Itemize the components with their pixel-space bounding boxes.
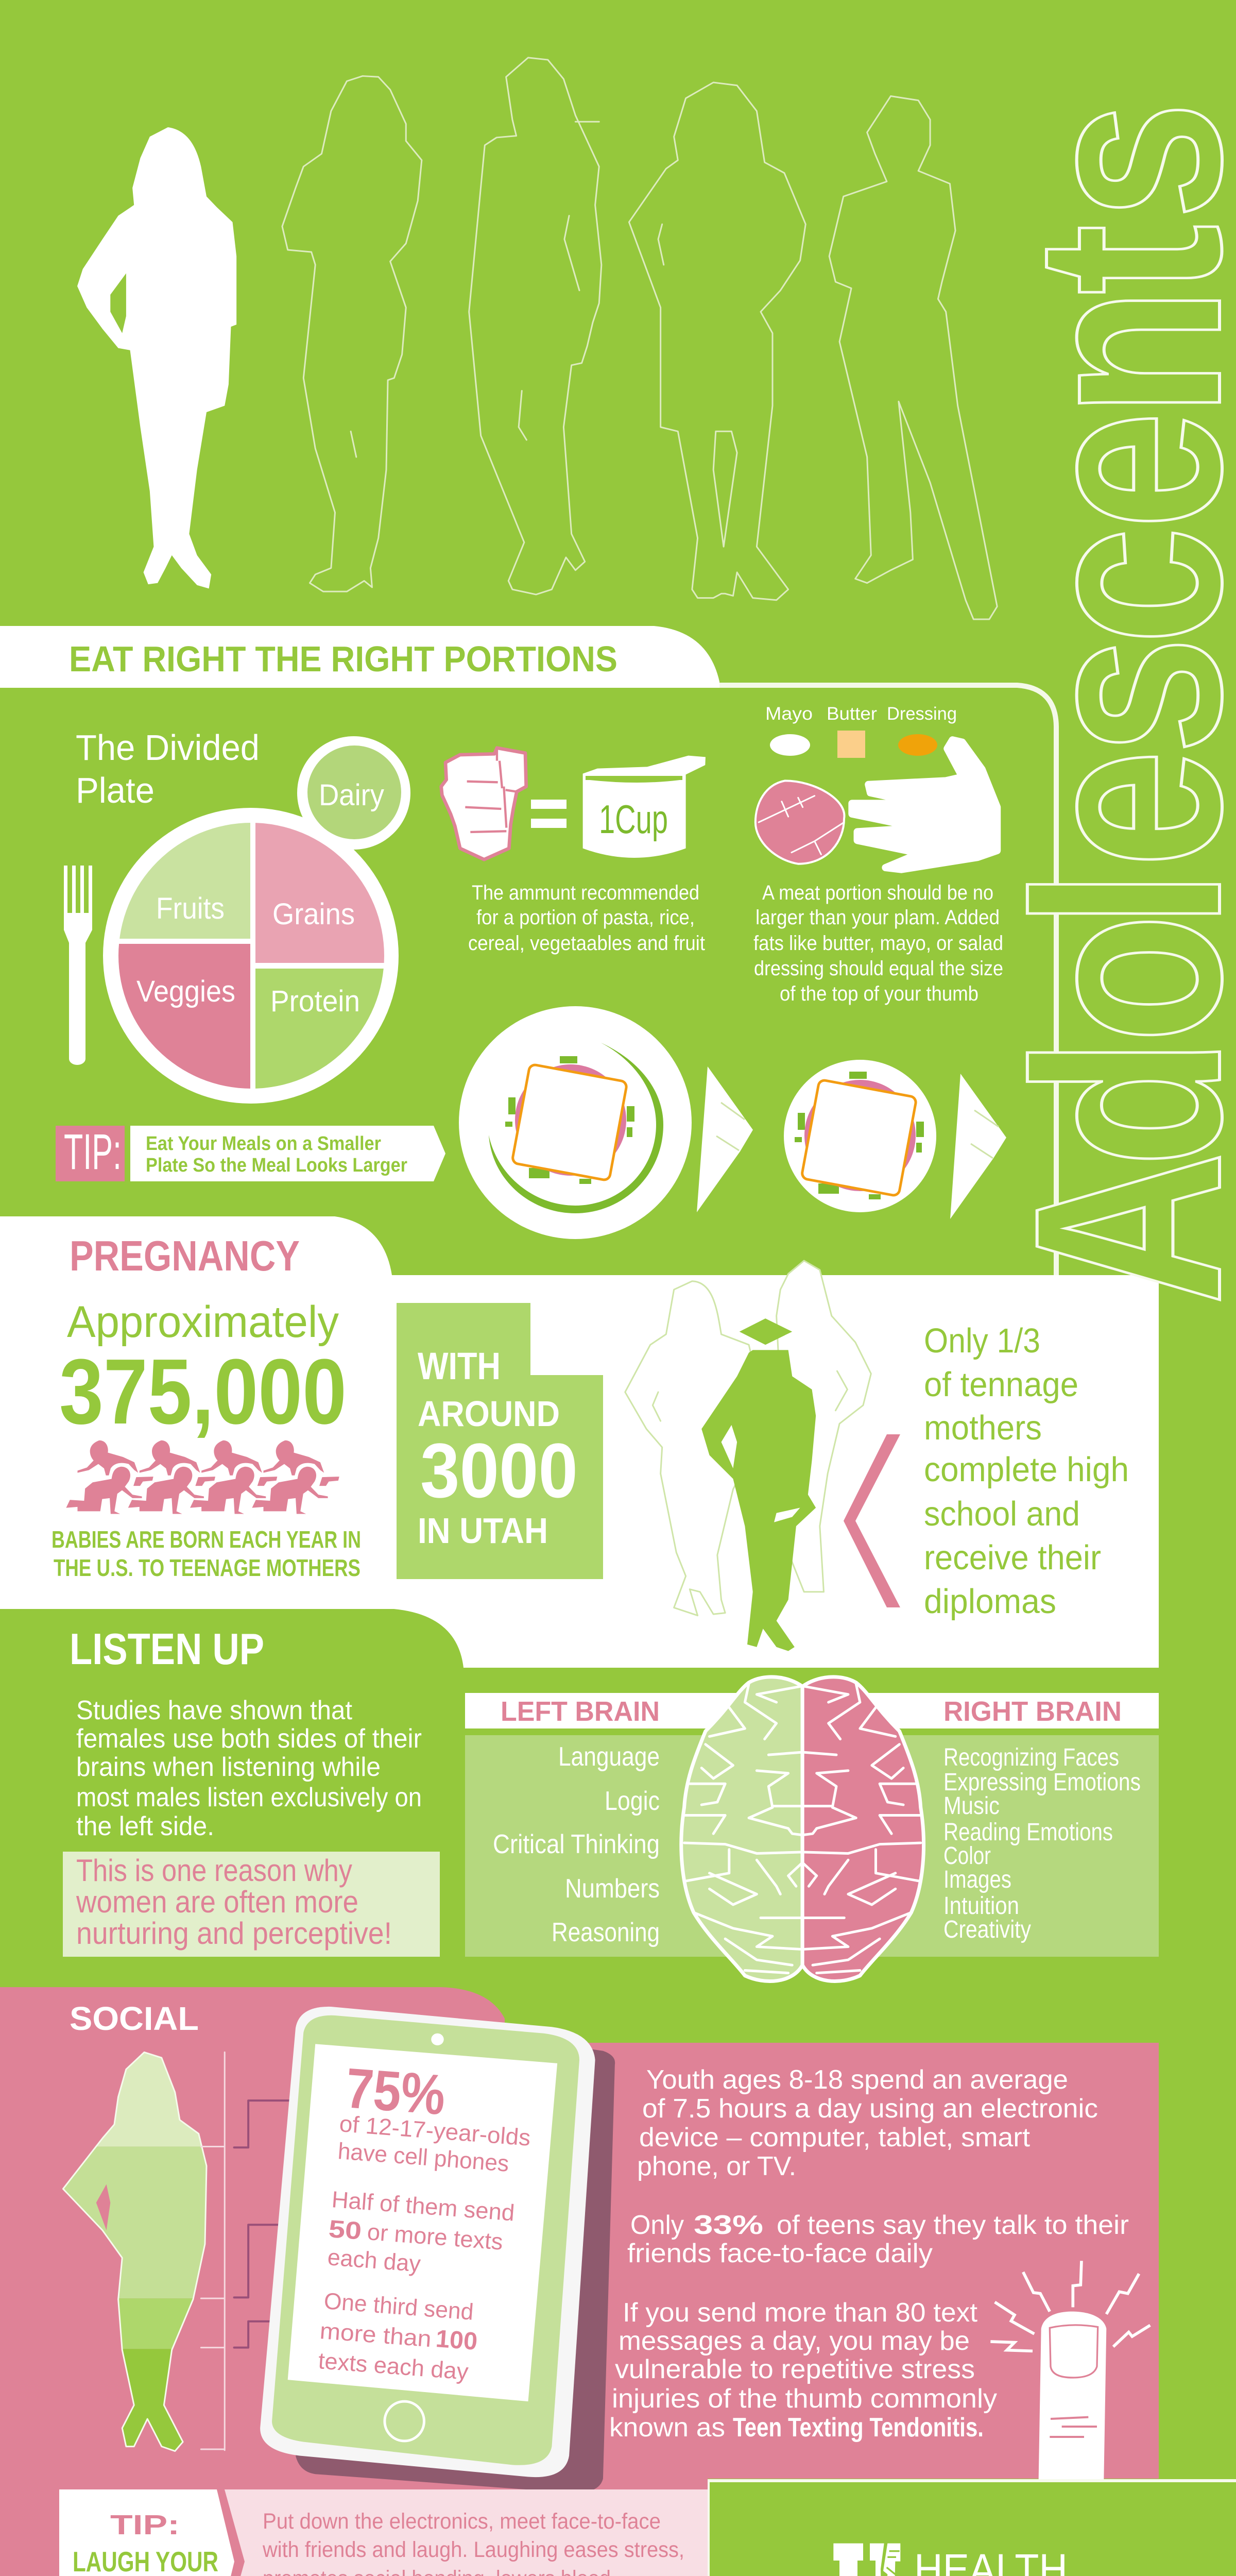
silhouette: outline woman 3 <box>469 58 602 595</box>
icon: meat <box>756 781 844 864</box>
plate rim <box>103 808 399 1104</box>
caption: one cup portion: The ammunt recommended <box>472 882 699 904</box>
text: screen time facts: 33% <box>694 2210 763 2240</box>
stat: 375,000 babies <box>52 1297 361 1581</box>
stat: 375,000 babies: 375,000 <box>59 1340 347 1444</box>
icon: equals sign <box>531 800 566 828</box>
tip: smaller plate: Eat Your Meals on a Smaller <box>146 1133 381 1155</box>
panel outline: eat right <box>719 685 1056 1276</box>
caption: meat portion: of the top of your thumb <box>780 982 978 1005</box>
text: screen time facts: known as <box>609 2413 725 2443</box>
phone screen statistics: have cell phones <box>337 2138 510 2177</box>
silhouette: outline woman 2 <box>282 76 422 591</box>
text: teen mothers diplomas <box>924 1321 1129 1621</box>
text: screen time facts: injuries of the thumb commonly <box>612 2384 997 2414</box>
figure: banded silhouette <box>55 2046 213 2455</box>
right brain list <box>943 1744 1141 1943</box>
figure with phone connections <box>62 2052 289 2452</box>
heading: pregnancy: PREGNANCY <box>70 1232 300 1280</box>
right brain list: Recognizing Faces <box>943 1744 1119 1771</box>
plate labels: Veggies <box>136 975 235 1008</box>
text: listening study <box>76 1696 422 1841</box>
left brain list: Language <box>558 1742 660 1772</box>
right brain list: Color <box>943 1842 991 1870</box>
text: screen time facts: friends face-to-face daily <box>627 2239 933 2268</box>
tip: laugh your head off: TIP: <box>110 2510 180 2540</box>
heading: the divided plate: Plate <box>76 770 154 810</box>
text: screen time facts: Youth ages 8-18 spend an average <box>646 2065 1068 2095</box>
panel: left and right brain lists <box>465 1693 1159 1957</box>
tip: smaller plate: TIP: <box>64 1124 122 1180</box>
left brain list <box>493 1742 660 1947</box>
text: screen time facts: device – computer, tablet, smart <box>639 2123 1031 2153</box>
phone screen statistics: 50 <box>328 2215 363 2245</box>
tip: smaller plate <box>56 1124 445 1181</box>
icon: thumb with sparks <box>990 2261 1150 2480</box>
text: teen mothers diplomas: receive their <box>924 1538 1101 1577</box>
right brain list: Intuition <box>943 1892 1019 1920</box>
text: listening study: the left side. <box>76 1811 214 1841</box>
icon: fork <box>64 866 92 1065</box>
icon: napkin 2 <box>950 1074 1006 1219</box>
utah shape with stat: 3000 <box>420 1427 578 1514</box>
icon: measuring cup <box>583 756 706 858</box>
text: screen time facts: vulnerable to repetitive stress <box>615 2354 975 2384</box>
panel: left and right brain lists: RIGHT BRAIN <box>943 1696 1122 1727</box>
dairy circle <box>297 736 410 850</box>
text: screen time facts: of 7.5 hours a day using an electronic <box>642 2094 1098 2124</box>
icon: crawling babies <box>66 1440 339 1514</box>
text: screen time facts <box>609 2065 1129 2443</box>
plate labels: Fruits <box>156 892 225 925</box>
caption: one cup portion <box>468 882 705 955</box>
legend: mayo butter dressing <box>765 704 957 758</box>
caption: one cup portion: for a portion of pasta, rice, <box>476 906 695 929</box>
legend: mayo butter dressing: Dressing <box>887 704 957 724</box>
chart: divided plate <box>103 736 410 1104</box>
right brain list: Expressing Emotions <box>943 1769 1141 1796</box>
ruler <box>201 2052 225 2450</box>
heading: eat right the right portions: EAT RIGHT THE RIGHT PORTIONS <box>69 639 617 679</box>
plate sections <box>113 819 389 1093</box>
right brain list: Music <box>943 1792 1000 1820</box>
phone screen statistics <box>317 2056 531 2385</box>
silhouette: white woman <box>77 127 236 588</box>
panel: logo block <box>708 2479 1236 2576</box>
stat: 375,000 babies: THE U.S. TO TEENAGE MOTHERS <box>54 1554 360 1581</box>
right outline woman <box>777 1261 871 1592</box>
text: teen mothers diplomas: complete high <box>924 1450 1129 1489</box>
caption: meat portion <box>753 882 1003 1005</box>
tip: laugh your head off: with friends and laugh. Laughing eases stress, <box>262 2537 684 2562</box>
text: listening study: Studies have shown that <box>76 1696 353 1725</box>
text: teen mothers diplomas: Only 1/3 <box>924 1321 1040 1360</box>
text: screen time facts: messages a day, you may be <box>619 2326 970 2356</box>
tip: smaller plate: Plate So the Meal Looks Larger <box>146 1155 407 1176</box>
heading: listen up: LISTEN UP <box>70 1625 264 1674</box>
heading: social: SOCIAL <box>70 2000 199 2037</box>
utah shape with stat <box>397 1303 603 1579</box>
icon: phone <box>260 2007 615 2493</box>
right brain list: Reading Emotions <box>943 1819 1113 1846</box>
icon: brain <box>681 1677 924 1981</box>
caption: meat portion: A meat portion should be no <box>762 882 993 904</box>
arrow: pink chevron <box>844 1434 900 1607</box>
phone screen statistics: more than <box>319 2317 432 2352</box>
phone screen statistics: Half of them send <box>331 2186 516 2226</box>
icon: hand <box>852 740 997 870</box>
graduation cap <box>740 1318 792 1345</box>
panel: social <box>0 1987 1159 2576</box>
plate labels <box>136 778 384 1018</box>
callout: nurturing and perceptive: women are often more <box>76 1885 358 1919</box>
heading: the divided plate: The Divided <box>76 727 260 768</box>
left brain list: Reasoning <box>552 1918 660 1947</box>
text: teen mothers diplomas: school and <box>924 1495 1080 1533</box>
graduate woman <box>701 1350 816 1651</box>
legend: mayo butter dressing: Mayo <box>765 704 813 724</box>
panel: left and right brain lists: LEFT BRAIN <box>501 1696 660 1727</box>
callout: nurturing and perceptive <box>63 1852 440 1957</box>
phone screen statistics: 100 <box>435 2325 478 2355</box>
icon: fist <box>441 748 526 859</box>
icon: hand and meat <box>756 740 997 870</box>
phone screen statistics: or more texts <box>366 2218 504 2255</box>
phone screen statistics: each day <box>327 2244 422 2277</box>
left brain list: Critical Thinking <box>493 1829 660 1859</box>
text: teen mothers diplomas: mothers <box>924 1409 1042 1447</box>
panel: eat right header tab <box>0 626 719 688</box>
right brain list: Creativity <box>943 1916 1031 1943</box>
text: listening study: females use both sides of their <box>76 1724 422 1754</box>
text: listening study: brains when listening while <box>76 1752 381 1782</box>
utah shape with stat: AROUND <box>418 1394 560 1434</box>
plate labels: Grains <box>272 897 355 931</box>
tip: laugh your head off: Put down the electronics, meet face-to-face <box>263 2509 661 2534</box>
utah shape with stat: WITH <box>418 1345 501 1387</box>
hero silhouettes <box>77 58 997 619</box>
left hemisphere <box>681 1677 802 1981</box>
legend: mayo butter dressing: Butter <box>827 704 877 724</box>
icon: measuring cup: 1Cup <box>599 796 668 842</box>
text: teen mothers diplomas: of tennage <box>924 1365 1078 1404</box>
text: screen time facts: phone, or TV. <box>637 2151 796 2181</box>
panel: pregnancy <box>0 1216 1159 1668</box>
utah shape with stat: IN UTAH <box>418 1511 548 1551</box>
silhouette: outline woman 5 <box>829 96 997 619</box>
illustration: three women with graduate <box>625 1261 871 1651</box>
caption: meat portion: larger than your plam. Added <box>756 906 1000 929</box>
callout: nurturing and perceptive: This is one reason why <box>76 1853 352 1888</box>
caption: one cup portion: cereal, vegetaables and fruit <box>468 932 705 955</box>
text: screen time facts: Teen Texting Tendonitis. <box>733 2413 984 2443</box>
left brain list: Logic <box>605 1786 660 1816</box>
phone screen statistics: 75% <box>344 2056 448 2127</box>
right hemisphere <box>802 1677 924 1981</box>
text: screen time facts: Only <box>630 2210 684 2240</box>
right brain list: Images <box>943 1866 1011 1893</box>
silhouette: outline woman 4 <box>629 82 805 600</box>
icon: small plate with sandwich <box>784 1060 936 1212</box>
left outline woman <box>625 1281 757 1616</box>
callout: nurturing and perceptive: nurturing and perceptive! <box>76 1916 392 1951</box>
connector lines <box>234 2100 333 2348</box>
stat: 375,000 babies: Approximately <box>67 1297 339 1347</box>
phone screen statistics: of 12-17-year-olds <box>338 2110 531 2151</box>
plate labels: Protein <box>270 985 360 1018</box>
left brain list: Numbers <box>565 1874 660 1904</box>
phone screen statistics: texts each day <box>317 2347 470 2385</box>
phone screen statistics: One third send <box>323 2287 474 2325</box>
logo: university of utah health <box>833 2544 1068 2576</box>
caption: meat portion: dressing should equal the size <box>754 957 1003 980</box>
text: screen time facts: If you send more than 80 text <box>623 2298 978 2328</box>
icon: napkin 1 <box>697 1066 753 1212</box>
stat: 375,000 babies: BABIES ARE BORN EACH YEAR IN <box>52 1526 361 1553</box>
plate labels: Dairy <box>319 778 384 812</box>
caption: meat portion: fats like butter, mayo, or salad <box>753 932 1003 955</box>
tip: laugh your head off <box>59 2489 708 2576</box>
text: teen mothers diplomas: diplomas <box>924 1582 1056 1621</box>
logo mark <box>833 2544 900 2576</box>
text: listening study: most males listen exclusively on <box>76 1783 422 1812</box>
icon: large plate with sandwich <box>459 1006 692 1239</box>
heading: the divided plate <box>76 727 260 810</box>
text: screen time facts: of teens say they talk to their <box>777 2210 1129 2240</box>
